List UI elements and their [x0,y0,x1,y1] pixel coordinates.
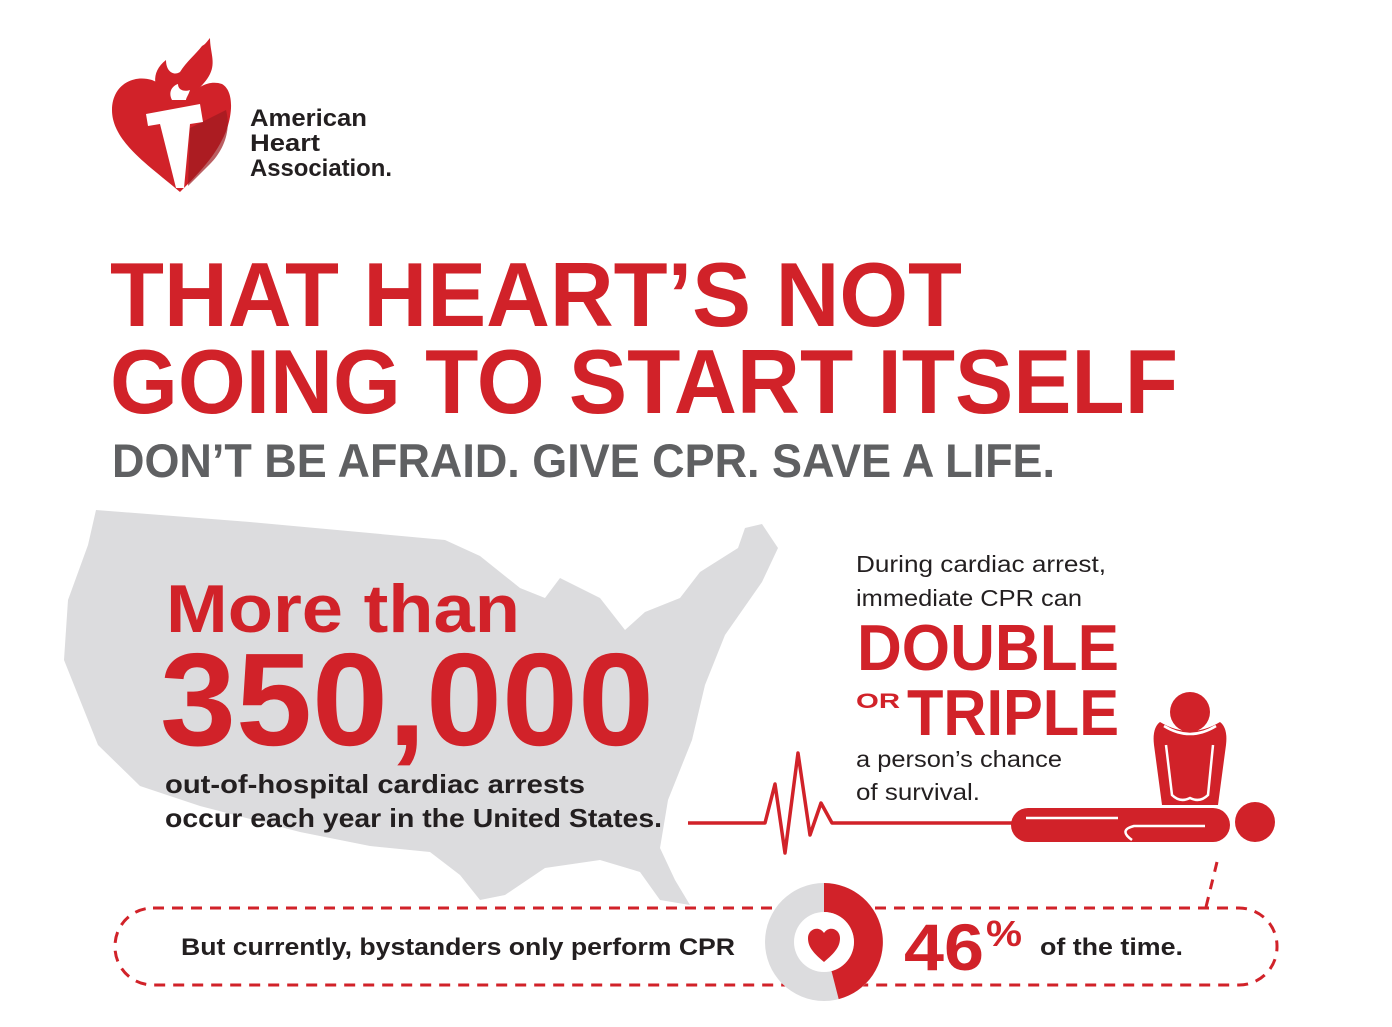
stat: double or triple survival: TRIPLE [907,676,1119,749]
stat: 46%: 46 [904,910,984,984]
stat: 350,000 arrests: 350,000 [160,626,654,773]
stat: 46%: of the time. [1040,934,1183,961]
title: THAT HEART’S NOT [110,245,962,346]
stat: double or triple survival: During cardiac arrest, [856,551,1106,577]
icon: CPR figures [1011,692,1275,842]
title [110,245,1178,433]
connector dashed line [1206,862,1217,907]
stat: double or triple survival: immediate CPR can [856,585,1082,611]
stat: double or triple survival: a person’s chance [856,746,1062,772]
icon: heart [808,929,840,962]
title: GOING TO START ITSELF [110,332,1178,433]
logo text: Association. [250,155,392,182]
heartbeat line [688,753,1012,853]
logo text [250,105,392,182]
stat: 350,000 arrests: occur each year in the United States. [165,803,662,833]
stat: double or triple survival [856,551,1119,805]
stat: 350,000 arrests: More than [166,571,520,647]
callout text: But currently, bystanders only perform CPR [181,934,735,961]
subtitle: DON’T BE AFRAID. GIVE CPR. SAVE A LIFE. [112,434,1055,487]
stat: 46%: % [986,913,1022,954]
stat: 350,000 arrests [160,571,662,833]
logo text: Heart [250,130,320,157]
map: united states silhouette [64,510,778,905]
logo text: American [250,105,367,132]
stat: 46% [904,910,1183,984]
donut chart: 46% [765,883,883,1001]
stat: double or triple survival: OR [856,690,900,713]
icon: heart with torch [112,38,231,192]
stat: 350,000 arrests: out-of-hospital cardiac arrests [165,769,585,799]
stat: double or triple survival: DOUBLE [857,611,1119,684]
logo [112,38,392,192]
stat: double or triple survival: of survival. [856,779,980,805]
dashed callout box [115,908,1277,985]
